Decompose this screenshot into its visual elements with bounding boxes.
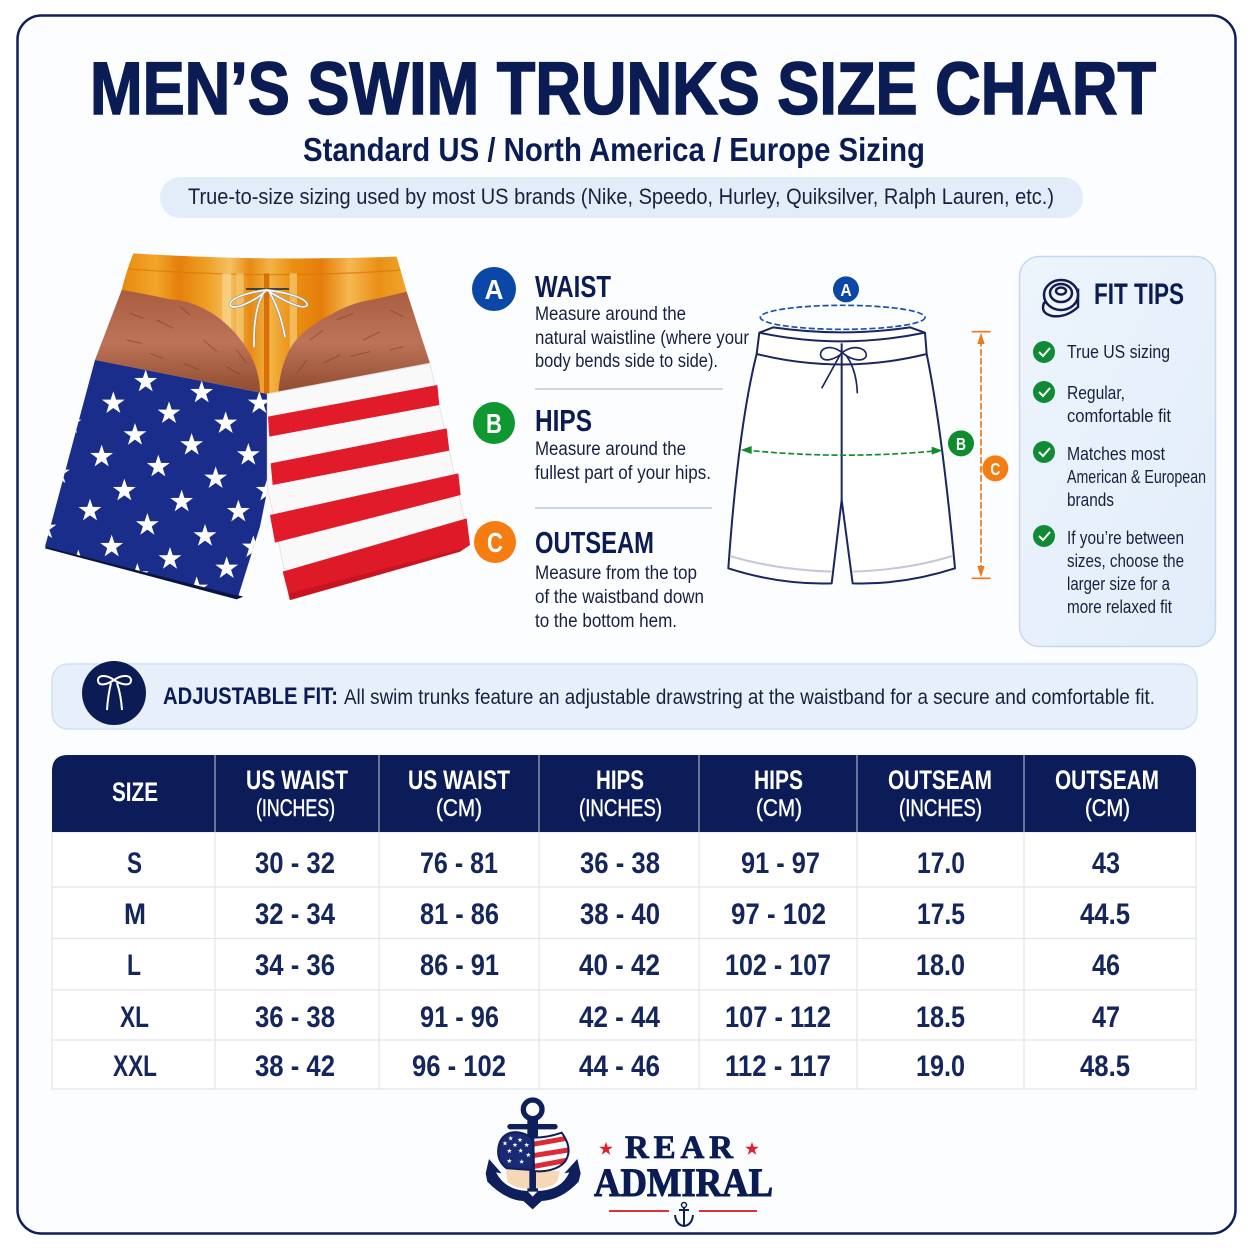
row XXL: 38 - 42 <box>255 1050 335 1083</box>
logo rule with small anchor <box>609 1202 757 1226</box>
row L: L <box>127 949 141 982</box>
row M: 38 - 40 <box>580 898 660 931</box>
row M <box>124 898 1130 931</box>
outseam instructions: of the waistband down <box>535 587 704 608</box>
outseam instructions: Measure from the top <box>535 563 697 584</box>
table header <box>52 755 1196 832</box>
logo stars <box>599 1142 759 1155</box>
table header: (CM) <box>756 795 802 822</box>
label: B hips marker: B <box>486 408 502 439</box>
swim trunks illustration <box>34 253 470 600</box>
row L: 102 - 107 <box>725 949 831 982</box>
row XL: XL <box>120 1001 149 1034</box>
row XXL <box>113 1050 1130 1083</box>
wordmark: admiral: ADMIRAL <box>594 1160 773 1205</box>
row M: 81 - 86 <box>420 898 499 931</box>
adjustable fit banner <box>52 661 1197 729</box>
banner text <box>163 683 1155 710</box>
banner text: All swim trunks feature an adjustable drawstring at the waistband for a secure and comfortable fit. <box>344 686 1155 709</box>
table header: (INCHES) <box>899 795 982 822</box>
blue star panel <box>34 360 279 599</box>
row S: 43 <box>1092 847 1120 880</box>
waist instructions: natural waistline (where your <box>535 328 750 349</box>
wordmark: rear: REAR <box>625 1130 734 1166</box>
row XXL: 19.0 <box>916 1050 965 1083</box>
row L: 46 <box>1092 949 1120 982</box>
table header: HIPS <box>596 765 644 795</box>
table header: OUTSEAM <box>1055 765 1159 795</box>
row S: 30 - 32 <box>255 847 335 880</box>
row L: 34 - 36 <box>255 949 335 982</box>
row S: 91 - 97 <box>741 847 820 880</box>
sizing note pill: True-to-size sizing used by most US brands (Nike, Speedo, Hurley, Quiksilver, Ralph Lauren, etc.) <box>188 184 1054 209</box>
tip 3: Matches most <box>1067 443 1165 464</box>
label: A waist marker: A <box>484 274 504 305</box>
brown printed panels <box>95 290 430 394</box>
row M: M <box>124 898 146 931</box>
waist instructions: Measure around the <box>535 304 686 325</box>
B hip arrow: B <box>956 434 966 454</box>
table header: (INCHES) <box>579 795 662 822</box>
row M: 44.5 <box>1080 898 1130 931</box>
row XXL: 44 - 46 <box>579 1050 660 1083</box>
table header: HIPS <box>754 765 803 795</box>
tip 1: True US sizing <box>1067 341 1170 362</box>
table header: (CM) <box>1085 795 1130 822</box>
row XL: 91 - 96 <box>420 1001 499 1034</box>
tip 3: American & European <box>1067 466 1206 487</box>
hips instructions: fullest part of your hips. <box>535 463 711 484</box>
waist instructions: body bends side to side). <box>535 351 718 372</box>
row S: 36 - 38 <box>580 847 660 880</box>
label: B hips marker <box>473 402 515 444</box>
row S: S <box>127 847 142 880</box>
tip 4 <box>1033 525 1184 617</box>
tip 4: sizes, choose the <box>1067 550 1184 571</box>
A waist loop: A <box>840 280 852 300</box>
tip 1 <box>1033 341 1170 363</box>
row XL: 42 - 44 <box>579 1001 660 1034</box>
fit tips heading: FIT TIPS <box>1094 278 1184 311</box>
table header: (CM) <box>436 795 482 822</box>
tip 2: comfortable fit <box>1067 405 1171 426</box>
label: C outseam marker: C <box>487 527 503 558</box>
icon: anchor with flag trunks <box>486 1100 581 1209</box>
table header: (INCHES) <box>256 795 335 822</box>
brand logo <box>486 1100 773 1226</box>
red and white striped panel <box>267 363 470 600</box>
size table <box>52 755 1196 1089</box>
row S <box>127 847 1120 880</box>
tip 2: Regular, <box>1067 382 1125 403</box>
waist heading: WAIST <box>535 269 611 304</box>
row XL: 107 - 112 <box>725 1001 831 1034</box>
tip 3: brands <box>1067 489 1114 510</box>
row XXL: XXL <box>113 1050 157 1083</box>
A waist loop <box>760 276 925 329</box>
table header: OUTSEAM <box>888 765 992 795</box>
row XL <box>120 1001 1120 1034</box>
row XXL: 48.5 <box>1080 1050 1130 1083</box>
waistband and crotch panel <box>120 253 407 400</box>
subtitle: Standard US / North America / Europe Sizing <box>303 131 925 168</box>
row L: 40 - 42 <box>579 949 660 982</box>
hips heading: HIPS <box>535 403 592 438</box>
row M: 32 - 34 <box>255 898 335 931</box>
row XL: 18.5 <box>916 1001 965 1034</box>
row S: 76 - 81 <box>420 847 498 880</box>
row M: 17.5 <box>917 898 965 931</box>
banner text: ADJUSTABLE FIT: <box>163 683 338 710</box>
hips instructions: Measure around the <box>535 439 686 460</box>
row XXL: 112 - 117 <box>725 1050 831 1083</box>
table header: US WAIST <box>408 765 510 795</box>
row XXL: 96 - 102 <box>412 1050 506 1083</box>
hips instructions <box>535 439 711 484</box>
tip 3 <box>1033 441 1206 510</box>
tip 2 <box>1033 381 1171 426</box>
row L: 86 - 91 <box>420 949 499 982</box>
tip 4: larger size for a <box>1067 573 1171 594</box>
outseam instructions <box>535 563 704 632</box>
row XL: 47 <box>1092 1001 1120 1034</box>
outseam heading: OUTSEAM <box>535 525 654 560</box>
row L <box>127 949 1120 982</box>
B hip arrow <box>741 430 974 456</box>
row S: 17.0 <box>917 847 965 880</box>
table header: SIZE <box>112 777 158 807</box>
shorts outline <box>728 327 955 583</box>
row M: 97 - 102 <box>731 898 826 931</box>
icon: rolled waistband <box>1043 280 1078 316</box>
tip 4: more relaxed fit <box>1067 596 1172 617</box>
C outseam arrow <box>972 332 1008 578</box>
panel: fit tips <box>1020 256 1216 646</box>
waist instructions <box>535 304 750 372</box>
outseam instructions: to the bottom hem. <box>535 611 677 632</box>
table header: US WAIST <box>246 765 348 795</box>
measurement diagram <box>728 276 1008 583</box>
tip 4: If you’re between <box>1067 527 1184 548</box>
sizing note pill <box>160 177 1083 218</box>
C outseam arrow: C <box>990 459 1000 479</box>
row XL: 36 - 38 <box>255 1001 335 1034</box>
label: A waist marker <box>472 267 516 311</box>
row L: 18.0 <box>916 949 965 982</box>
label: C outseam marker <box>474 521 516 563</box>
icon: drawstring bow <box>82 661 146 725</box>
drawstring <box>230 289 307 347</box>
